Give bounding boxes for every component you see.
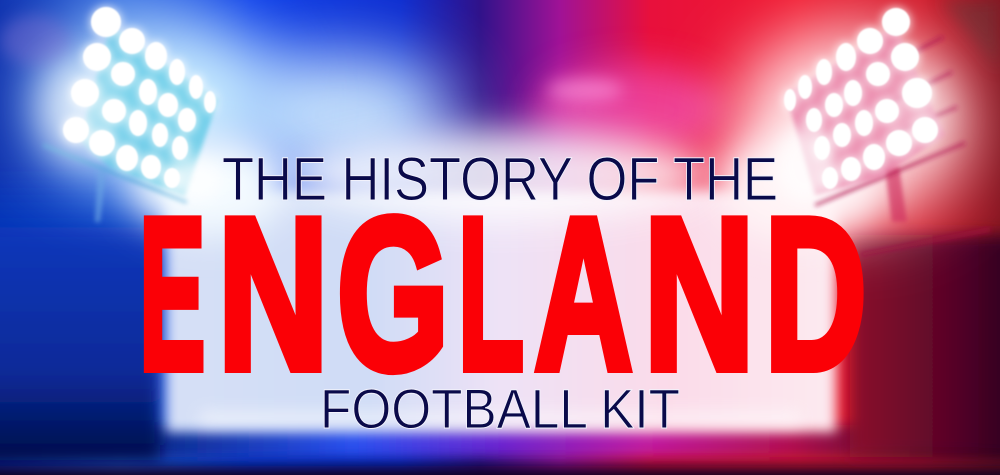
floodlight rods xyxy=(815,37,965,205)
background: glows over stage top xyxy=(290,130,710,220)
floodlight housing xyxy=(80,25,218,196)
floodlight: right (red) xyxy=(775,8,990,256)
background: bottom colour band xyxy=(0,425,1000,457)
background: corner rays xyxy=(940,0,1000,70)
floodlight: left (blue) xyxy=(40,7,223,222)
title: england: G xyxy=(337,172,449,414)
background: stage light strip xyxy=(200,412,800,426)
background: left column xyxy=(0,170,160,460)
title: football kit: FOOTBALL KIT xyxy=(320,377,680,440)
title: england: A xyxy=(534,172,632,414)
background: bottom dark strip xyxy=(0,466,1000,475)
floodlight rods xyxy=(43,145,187,202)
lamp haze xyxy=(775,127,835,203)
title: england: L xyxy=(458,172,524,414)
background: blue haze xyxy=(225,55,455,175)
ground glint xyxy=(860,227,990,256)
lamps xyxy=(63,7,216,188)
lamps xyxy=(784,8,938,189)
background: right column xyxy=(850,235,1000,457)
background: pink haze xyxy=(535,65,725,155)
title: england: D xyxy=(765,172,867,414)
title: the history of the: THE HISTORY OF THE xyxy=(222,145,778,213)
title: england: N xyxy=(644,172,755,414)
lamp haze xyxy=(40,60,110,160)
background: stage floor xyxy=(166,190,836,432)
title: england: E xyxy=(139,172,205,414)
floodlight housing xyxy=(786,25,945,195)
floodlight pole xyxy=(885,166,907,222)
floodlight pole xyxy=(95,172,106,222)
title: england: N xyxy=(218,172,329,414)
